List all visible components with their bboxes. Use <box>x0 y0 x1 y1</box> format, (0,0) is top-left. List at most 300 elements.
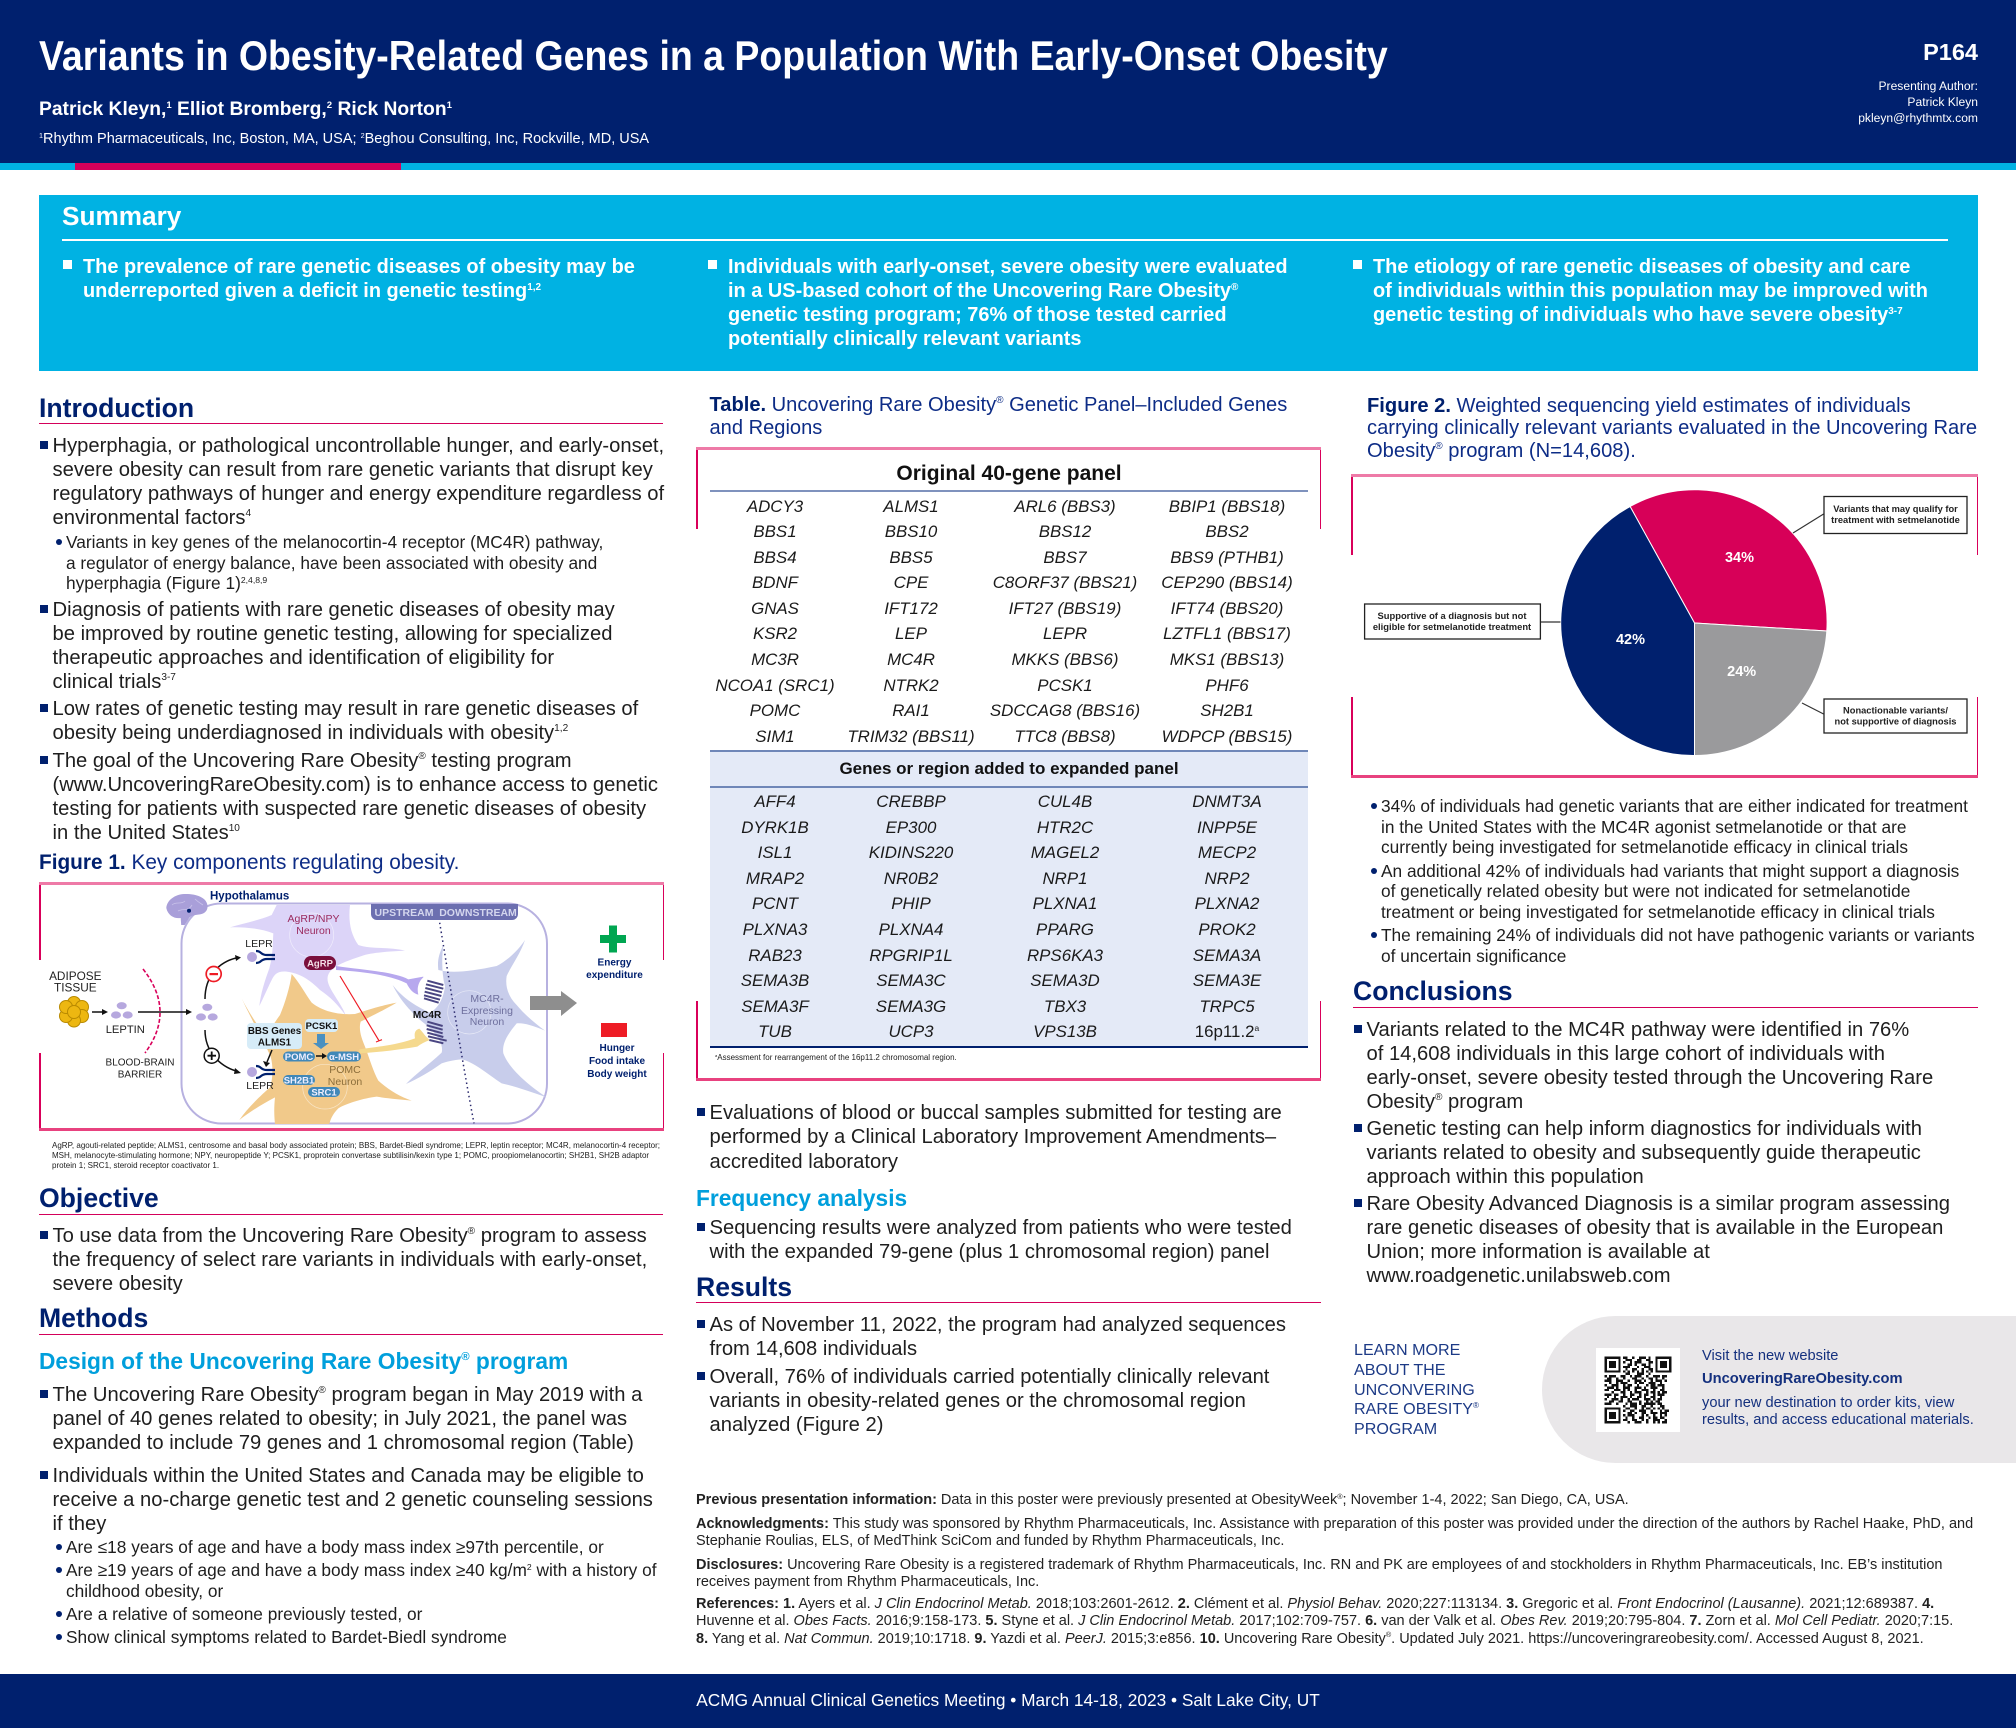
value labels <box>1616 550 1756 680</box>
value labels: 42% <box>1616 632 1645 648</box>
poster number: P164 <box>1923 39 1978 65</box>
intro bullet 2: therapeutic approaches and identification of eligibility for <box>52 647 554 669</box>
adipose label: TISSUE <box>54 980 97 994</box>
column 4: BBS2 <box>1205 522 1249 541</box>
results bullet 2: Overall, 76% of individuals carried potentially clinically relevant <box>710 1366 1269 1388</box>
references: References: 1. Ayers et al. J Clin Endocrinol Metab. 2018;103:2601-2612. 2. Clément et al. Physiol Behav. 2020;227:113134. 3. Gregoric et al. Front Endocrinol (Lausanne). 2021;12:689387. 4. <box>696 1596 1934 1612</box>
results bullet 2: analyzed (Figure 2) <box>710 1414 883 1436</box>
column 3: SDCCAG8 (BBS16) <box>990 701 1140 720</box>
figure 2 frame <box>1351 474 1978 778</box>
column 2: BBS10 <box>885 522 937 541</box>
methods bullet 1: expanded to include 79 genes and 1 chromosomal region (Table) <box>52 1432 634 1454</box>
leptin label: LEPTIN <box>106 1024 145 1036</box>
learn more text: RARE OBESITY® <box>1354 1400 1479 1418</box>
acknowledgments: Acknowledgments: This study was sponsored by Rhythm Pharmaceuticals, Inc. Assistance with preparation of this poster was provided under the direction of the authors by Rachel Haake, PhD, and <box>696 1516 1973 1532</box>
column 2: CPE <box>894 573 928 592</box>
AgRP pill <box>304 956 336 970</box>
intro sub-bullet <box>52 532 603 594</box>
column 4: CEP290 (BBS14) <box>1161 573 1293 592</box>
column 1: SIM1 <box>755 727 795 746</box>
figure 1 diagram <box>49 890 647 1124</box>
subheading: frequency: Frequency analysis <box>696 1185 907 1211</box>
inhibition line <box>340 976 382 1042</box>
references: 8. Yang et al. Nat Commun. 2019;10:1718. 9. Yazdi et al. PeerJ. 2015;3:e856. 10. Uncovering Rare Obesity®. Updated July 2021. https://uncoveringrareobesity.com/. Accessed August 8, 2021. <box>696 1630 1924 1647</box>
summary point 3: The etiology of rare genetic diseases of obesity and care <box>1373 256 1910 278</box>
column 1: ISL1 <box>758 843 792 862</box>
results bullet 1: As of November 11, 2022, the program had analyzed sequences <box>710 1314 1286 1336</box>
methods sub-bullet 2: childhood obesity, or <box>66 1581 223 1601</box>
column 4: SH2B1 <box>1200 701 1254 720</box>
AgRP/NPY neuron label: AgRP/NPY <box>288 913 339 925</box>
table rule <box>710 786 1308 788</box>
summary point 1 <box>62 255 635 303</box>
callout: nonactionable: Nonactionable variants/ <box>1843 706 1948 716</box>
table heading: Table. Uncovering Rare Obesity® Genetic Panel–Included Genes <box>710 394 1287 416</box>
summary heading: Summary <box>62 201 181 231</box>
methods bullet 1: The Uncovering Rare Obesity® program began in May 2019 with a <box>52 1384 642 1406</box>
intro bullet 2: clinical trials3-7 <box>52 671 176 693</box>
accent stripe <box>0 163 2016 170</box>
panel: website callout <box>1542 1316 2016 1463</box>
adipose label <box>49 969 102 994</box>
column 3: BBS7 <box>1043 548 1087 567</box>
intro bullet 1: environmental factors4 <box>52 506 251 528</box>
SRC1 pill: SRC1 <box>311 1088 337 1098</box>
intro bullet 1: Hyperphagia, or pathological uncontrollable hunger, and early-onset, <box>52 434 664 456</box>
MC4R neuron label: Neuron <box>470 1016 504 1028</box>
figure 1 abbreviations <box>52 1141 660 1170</box>
column 2 <box>847 496 975 746</box>
leptin dots <box>111 1002 133 1019</box>
column 3 <box>990 496 1140 746</box>
BBS genes box <box>247 1023 302 1049</box>
column 3: PPARG <box>1036 920 1094 939</box>
intro bullet 4 <box>39 748 658 844</box>
learn more text: ABOUT THE <box>1354 1361 1446 1379</box>
column 3: RPS6KA3 <box>1027 946 1103 965</box>
intro bullet 1 <box>39 434 664 530</box>
arrows: leptin path <box>92 1009 192 1015</box>
column 1: SEMA3B <box>741 971 809 990</box>
conclusions bullet 1: early-onset, severe obesity tested through the Uncovering Rare <box>1366 1066 1933 1088</box>
intro sub-bullet: Variants in key genes of the melanocortin-4 receptor (MC4R) pathway, <box>66 532 603 552</box>
AgRP neuron <box>230 905 405 1016</box>
column 1: GNAS <box>751 599 799 618</box>
presenting author: Presenting Author: <box>1878 79 1978 93</box>
column 3: MKKS (BBS6) <box>1011 650 1118 669</box>
column 3: NRP1 <box>1042 869 1088 888</box>
column 4: DNMT3A <box>1192 792 1262 811</box>
energy label <box>586 958 643 981</box>
table: expanded heading: Genes or region added to expanded panel <box>839 759 1179 778</box>
title: Variants in Obesity-Related Genes in a Population With Early-Onset Obesity <box>39 32 1388 79</box>
learn more text: LEARN MORE <box>1354 1341 1460 1359</box>
figure 1 abbreviations: MSH, melanocyte-stimulating hormone; NPY, neuropeptide Y; PCSK1, proprotein convertase subtilisin/kexin type 1; POMC, proopiomelanocortin; SH2B1, SH2B adaptor <box>52 1151 649 1160</box>
column 3: BBS12 <box>1039 522 1091 541</box>
figure 2 heading <box>1367 394 1977 462</box>
barrier label: BARRIER <box>118 1070 162 1080</box>
MC4R label: MC4R <box>413 1010 442 1021</box>
column 3: PCSK1 <box>1037 676 1093 695</box>
conclusions bullet 3 <box>1353 1192 1950 1288</box>
column 1: PCNT <box>752 894 798 913</box>
column 2 <box>869 792 954 1041</box>
column 3: ARL6 (BBS3) <box>1014 496 1116 516</box>
column 1: POMC <box>750 701 800 720</box>
POMC neuron <box>239 974 412 1124</box>
intro sub-bullet: hyperphagia (Figure 1)2,4,8,9 <box>66 573 267 593</box>
barrier label <box>106 1058 174 1080</box>
column 2: PHIP <box>891 894 931 913</box>
slice: 24% <box>1694 623 1827 756</box>
conclusions bullet 3: Rare Obesity Advanced Diagnosis is a similar program assessing <box>1366 1193 1950 1215</box>
arrow: inhibit <box>205 955 241 999</box>
column 1: MC3R <box>751 650 799 669</box>
receptor bottom <box>246 1066 275 1092</box>
slice: 42% <box>1561 506 1694 756</box>
heading: methods <box>39 1303 663 1335</box>
column 3: CUL4B <box>1038 792 1092 811</box>
heading: conclusions <box>1353 976 1978 1008</box>
hypothalamus label: Hypothalamus <box>210 890 289 902</box>
column 1 <box>741 792 810 1041</box>
column 4: BBIP1 (BBS18) <box>1169 496 1285 516</box>
heading: conclusions: Conclusions <box>1353 976 1513 1006</box>
column 1: ADCY3 <box>747 496 803 516</box>
intro bullet 4: The goal of the Uncovering Rare Obesity® testing program <box>52 750 572 772</box>
column 2: CREBBP <box>876 792 946 811</box>
figure 1 abbreviations: AgRP, agouti-related peptide; ALMS1, centrosome and basal body associated protein; BBS, Bardet-Biedl syndrome; LEPR, leptin receptor; MC4R, melanocortin-4 receptor; <box>52 1141 660 1150</box>
column 2: LEP <box>895 624 927 643</box>
heading: results: Results <box>696 1272 792 1302</box>
intro bullet 1: regulatory pathways of hunger and energy expenditure regardless of <box>52 482 664 504</box>
methods bullet 1 <box>39 1382 642 1454</box>
intro bullet 2: Diagnosis of patients with rare genetic diseases of obesity may <box>52 599 615 621</box>
upstream downstream banner <box>371 904 518 920</box>
hunger label: Hunger <box>600 1043 635 1054</box>
column 2: TRIM32 (BBS11) <box>847 727 975 746</box>
results bullet 2 <box>696 1364 1269 1436</box>
conclusions bullet 2: approach within this population <box>1366 1166 1644 1188</box>
disclosures <box>696 1557 1942 1590</box>
intro bullet 2 <box>39 598 615 694</box>
figure 2 bullet 3 <box>1367 925 1975 966</box>
summary point 1: The prevalence of rare genetic diseases of obesity may be <box>83 256 635 278</box>
POMC neuron label: Neuron <box>328 1076 362 1088</box>
callout: qualify <box>1793 496 1967 534</box>
column 1 <box>715 496 835 746</box>
website description: your new destination to order kits, view <box>1702 1394 1954 1410</box>
conclusions bullet 1: of 14,608 individuals in this large cohort of individuals with <box>1366 1042 1885 1064</box>
hunger label: Food intake <box>589 1056 645 1067</box>
learn more text: UNCONVERING <box>1354 1381 1475 1399</box>
column 2: SEMA3C <box>876 971 946 990</box>
conclusions bullet 2 <box>1353 1116 1922 1188</box>
dotted divider <box>437 905 474 1123</box>
POMC neuron label: POMC <box>329 1064 361 1076</box>
conclusions bullet 1: Obesity® program <box>1366 1090 1523 1112</box>
icon: fat cells <box>60 996 88 1027</box>
frequency text: with the expanded 79-gene (plus 1 chromosomal region) panel <box>710 1240 1270 1262</box>
figure 1 diagram: Neuron <box>296 925 331 937</box>
testing bullet: Evaluations of blood or buccal samples submitted for testing are <box>710 1102 1282 1124</box>
arrow: PCSK1 <box>313 1034 329 1049</box>
leptin dots inside <box>196 1004 218 1021</box>
table rule <box>710 490 1308 492</box>
column 4: INPP5E <box>1197 818 1257 837</box>
table heading: and Regions <box>710 417 822 439</box>
icon: brain <box>166 894 208 925</box>
figure 1 frame <box>39 882 664 1131</box>
AgRP projection <box>336 966 423 995</box>
objective text: the frequency of select rare variants in individuals with early-onset, <box>52 1248 647 1270</box>
heading: introduction <box>39 392 663 424</box>
frequency text: Sequencing results were analyzed from patients who were tested <box>710 1216 1292 1238</box>
summary rule <box>62 239 1948 241</box>
presenting author: Patrick Kleyn <box>1907 95 1978 109</box>
arrow: output <box>530 991 577 1016</box>
column 1: KSR2 <box>753 624 797 643</box>
column 2: ALMS1 <box>883 496 939 516</box>
disclosures: Disclosures: Uncovering Rare Obesity is a registered trademark of Rhythm Pharmaceuticals, Inc. RN and PK are employees of and stockholders in Rhythm Pharmaceuticals, Inc. EB’s institution <box>696 1557 1942 1573</box>
MC4R neuron label: Expressing <box>461 1005 513 1017</box>
table: original panel genes <box>715 496 1293 746</box>
methods bullet 2: Individuals within the United States and Canada may be eligible to <box>52 1464 644 1486</box>
column 3: LEPR <box>1043 624 1087 643</box>
intro bullet 4: (www.UncoveringRareObesity.com) is to enhance access to genetic <box>52 774 658 796</box>
upstream downstream banner: UPSTREAM <box>375 907 434 919</box>
testing bullet: accredited laboratory <box>710 1151 898 1173</box>
column 1: AFF4 <box>754 792 796 811</box>
column 4: PHF6 <box>1205 676 1249 695</box>
methods bullet 2: receive a no-charge genetic test and 2 genetic counseling sessions <box>52 1488 653 1510</box>
table frame <box>696 447 1321 1081</box>
column 1: BDNF <box>752 573 798 592</box>
column 4: TRPC5 <box>1199 997 1255 1016</box>
column 2: IFT172 <box>884 599 938 618</box>
conclusions bullet 1: Variants related to the MC4R pathway were identified in 76% <box>1366 1018 1909 1040</box>
authors: Patrick Kleyn,1 Elliot Bromberg,2 Rick Norton1 <box>39 99 452 120</box>
conclusions bullet 2: Genetic testing can help inform diagnostics for individuals with <box>1366 1118 1922 1140</box>
MC4R coils <box>424 981 447 1043</box>
website address: UncoveringRareObesity.com <box>1702 1371 1903 1387</box>
figure 2 bullet 1: currently being investigated for setmelanotide efficacy in clinical trials <box>1381 837 1908 857</box>
methods bullet 2: if they <box>52 1512 106 1534</box>
testing bullet <box>696 1100 1282 1175</box>
callout: supportive: Supportive of a diagnosis but not <box>1378 610 1526 621</box>
references: Huvenne et al. Obes Facts. 2016;9:158-173. 5. Styne et al. J Clin Endocrinol Metab. 2017;102:709-757. 6. van der Valk et al. Obes Rev. 2019;20:795-804. 7. Zorn et al. Mol Cell Pediatr. 2020;7:15. <box>696 1613 1953 1629</box>
header band <box>0 0 2016 163</box>
column 1: PLXNA3 <box>743 920 807 939</box>
objective text: To use data from the Uncovering Rare Obesity® program to assess <box>52 1224 647 1246</box>
column 1: NCOA1 (SRC1) <box>715 676 835 695</box>
website text: Visit the new website <box>1702 1348 1838 1364</box>
column 2: UCP3 <box>888 1022 934 1041</box>
intro bullet 1: severe obesity can result from rare genetic variants that disrupt key <box>52 458 653 480</box>
conclusions bullet 2: variants related to obesity and subsequently guide therapeutic <box>1366 1142 1921 1164</box>
affiliations: 1Rhythm Pharmaceuticals, Inc, Boston, MA, USA; 2Beghou Consulting, Inc, Rockville, MD, USA <box>39 131 649 147</box>
heading: objective: Objective <box>39 1183 159 1213</box>
testing bullet: performed by a Clinical Laboratory Improvement Amendments– <box>710 1126 1276 1148</box>
figure 2 heading: carrying clinically relevant variants evaluated in the Uncovering Rare <box>1367 417 1977 439</box>
MC4R neuron <box>393 940 547 1097</box>
callout: qualify: Variants that may qualify for <box>1833 504 1958 514</box>
column 4: BBS9 (PTHB1) <box>1170 548 1284 567</box>
column 3: HTR2C <box>1037 818 1093 837</box>
heading: methods: Methods <box>39 1303 148 1333</box>
hunger label: Body weight <box>587 1069 647 1080</box>
column 3: MAGEL2 <box>1031 843 1099 862</box>
summary point 2: Individuals with early-onset, severe obesity were evaluated <box>728 256 1288 278</box>
summary point 3: genetic testing of individuals who have severe obesity3-7 <box>1373 304 1903 326</box>
figure 2 heading: Figure 2. Weighted sequencing yield estimates of individuals <box>1367 394 1911 416</box>
summary point 1: underreported given a deficit in genetic testing1,2 <box>83 280 541 302</box>
column 2: BBS5 <box>889 548 933 567</box>
table: expanded panel genes <box>741 792 1262 1041</box>
conclusions bullet 3: Union; more information is available at <box>1366 1241 1710 1263</box>
methods sub-bullet 4: Show clinical symptoms related to Bardet-Biedl syndrome <box>66 1627 507 1647</box>
MSH pill: α-MSH <box>329 1052 359 1063</box>
conclusions bullet 3: www.roadgenetic.unilabsweb.com <box>1366 1265 1671 1287</box>
methods sub-bullet 1: Are ≤18 years of age and have a body mass index ≥97th percentile, or <box>66 1537 604 1557</box>
methods bullet 2 <box>39 1464 653 1536</box>
SH2B1 pill: SH2B1 <box>284 1076 315 1086</box>
column 2: KIDINS220 <box>869 843 953 862</box>
figure 2 bullet 1: 34% of individuals had genetic variants that are either indicated for treatment <box>1381 796 1968 816</box>
heading: introduction: Introduction <box>39 393 194 423</box>
figure 1 abbreviations: protein 1; SRC1, steroid receptor coactivator 1. <box>52 1161 219 1170</box>
summary point 3 <box>1352 255 1928 327</box>
column 1: BBS4 <box>753 548 797 567</box>
heading: results <box>696 1271 1321 1303</box>
figure 2 bullet 2: An additional 42% of individuals had variants that might support a diagnosis <box>1381 860 1959 880</box>
energy label: Energy <box>598 958 632 968</box>
BBS genes box: BBS Genes <box>248 1026 302 1037</box>
methods sub-bullet 3: Are a relative of someone previously tested, or <box>66 1604 422 1624</box>
MC4R neuron label <box>461 993 513 1028</box>
acknowledgments: Stephanie Roulias, ELS, of MedThink SciCom and funded by Rhythm Pharmaceuticals, Inc. <box>696 1533 1284 1549</box>
summary point 2: potentially clinically relevant variants <box>728 328 1081 350</box>
references <box>696 1596 1953 1647</box>
learn more text <box>1354 1341 1479 1438</box>
methods bullet 1: panel of 40 genes related to obesity; in July 2021, the panel was <box>52 1408 627 1430</box>
figure 2 bullet 3: of uncertain significance <box>1381 946 1566 966</box>
callout: qualify: treatment with setmelanotide <box>1831 515 1960 525</box>
intro bullet 2: be improved by routine genetic testing, allowing for specialized <box>52 623 612 645</box>
receptor top: LEPR <box>245 938 273 950</box>
hypothalamus outline <box>182 904 547 1124</box>
column 3: IFT27 (BBS19) <box>1009 599 1121 618</box>
disclosures: receives payment from Rhythm Pharmaceuticals, Inc. <box>696 1574 1039 1590</box>
figure 2 bullet 2: of genetically related obesity but were not indicated for setmelanotide <box>1381 881 1910 901</box>
intro bullet 3 <box>39 697 638 745</box>
pie chart <box>1364 490 1968 755</box>
column 3: TBX3 <box>1044 997 1086 1016</box>
callout: supportive <box>1365 604 1560 639</box>
upstream downstream banner: DOWNSTREAM <box>439 907 517 919</box>
column 3 <box>1027 792 1103 1041</box>
POMC projection <box>359 1029 430 1053</box>
conclusions bullet 1 <box>1353 1018 1933 1114</box>
column 3: C8ORF37 (BBS21) <box>993 573 1137 592</box>
website description: results, and access educational materials. <box>1702 1412 1974 1428</box>
nucleus rings <box>290 913 334 957</box>
footer band: ACMG Annual Clinical Genetics Meeting • March 14-18, 2023 • Salt Lake City, UT <box>696 1690 1320 1710</box>
summary point 2 <box>707 255 1288 351</box>
callout: nonactionable <box>1802 699 1967 733</box>
column 2: NTRK2 <box>883 676 939 695</box>
footer band <box>0 1674 2016 1728</box>
column 1: RAB23 <box>748 946 802 965</box>
column 3: PLXNA1 <box>1033 894 1097 913</box>
value labels: 34% <box>1725 550 1754 566</box>
table footnote: aAssessment for rearrangement of the 16p11.2 chromosomal region. <box>715 1053 957 1062</box>
column 2: EP300 <box>886 818 936 837</box>
barrier label: BLOOD-BRAIN <box>106 1058 174 1068</box>
results bullet 1: from 14,608 individuals <box>710 1338 917 1360</box>
column 2: NR0B2 <box>884 869 938 888</box>
POMC pill: POMC <box>285 1052 313 1063</box>
presenting author: pkleyn@rhythmtx.com <box>1858 111 1978 125</box>
learn more text: PROGRAM <box>1354 1420 1437 1438</box>
energy label: expenditure <box>586 970 643 981</box>
previous presentation: Previous presentation information: Data in this poster were previously presented at ObesityWeek®; November 1-4, 2022; San Diego, CA, USA. <box>696 1492 1629 1508</box>
MC4R neuron label: MC4R- <box>470 993 504 1005</box>
callout: supportive: eligible for setmelanotide treatment <box>1373 621 1531 632</box>
column 1: MRAP2 <box>746 869 804 888</box>
column 1: BBS1 <box>753 522 797 541</box>
column 4: SEMA3A <box>1193 946 1261 965</box>
subheading: design: Design of the Uncovering Rare Obesity® program <box>39 1348 568 1374</box>
column 4: NRP2 <box>1204 869 1250 888</box>
summary point 2: in a US-based cohort of the Uncovering Rare Obesity® <box>728 280 1238 302</box>
intro sub-bullet: a regulator of energy balance, have been associated with obesity and <box>66 553 597 573</box>
column 1: TUB <box>758 1022 792 1041</box>
column 4 <box>1192 792 1262 1041</box>
summary point 2: genetic testing program; 76% of those tested carried <box>728 304 1227 326</box>
column 3: TTC8 (BBS8) <box>1014 727 1116 746</box>
column 2: PLXNA4 <box>879 920 943 939</box>
column 4: SEMA3E <box>1193 971 1261 990</box>
presenting author <box>1858 79 1978 125</box>
figure 1 heading: Figure 1. Key components regulating obesity. <box>39 851 459 874</box>
column 4: MKS1 (BBS13) <box>1170 650 1284 669</box>
conclusions bullet 3: rare genetic diseases of obesity that is available in the European <box>1366 1217 1943 1239</box>
icon: minus hunger <box>601 1023 627 1037</box>
column 4: 16p11.2a <box>1195 1022 1259 1041</box>
receptor top <box>245 938 275 963</box>
table: original panel heading: Original 40-gene panel <box>896 462 1122 484</box>
POMC neuron label <box>328 1064 362 1088</box>
column 1: SEMA3F <box>741 997 809 1016</box>
adipose label: ADIPOSE <box>49 969 102 983</box>
figure 2 bullet 3: The remaining 24% of individuals did not have pathogenic variants or variants <box>1381 925 1975 945</box>
figure 2 bullet 1 <box>1367 796 1968 858</box>
blood brain barrier arc <box>143 969 160 1053</box>
BBS genes box: ALMS1 <box>258 1038 292 1048</box>
column 4: PLXNA2 <box>1195 894 1259 913</box>
column 2: SEMA3G <box>876 997 946 1016</box>
methods sub-bullet 2: Are ≥19 years of age and have a body mass index ≥40 kg/m2 with a history of <box>66 1560 657 1580</box>
intro bullet 4: testing for patients with suspected rare genetic diseases of obesity <box>52 798 646 820</box>
results bullet 1 <box>696 1312 1286 1360</box>
objective text <box>39 1224 647 1296</box>
results bullet 2: variants in obesity-related genes or the chromosomal region <box>710 1390 1246 1412</box>
column 2: RAI1 <box>892 701 930 720</box>
summary point 3: of individuals within this population may be improved with <box>1373 280 1928 302</box>
arrow: BBS to LEPR <box>263 1050 272 1067</box>
arrow: POMC to MSH <box>316 1053 327 1059</box>
